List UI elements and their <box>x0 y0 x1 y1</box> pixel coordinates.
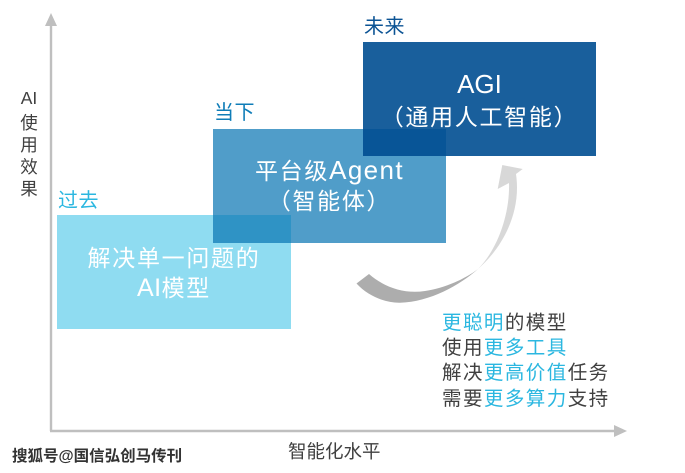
text block: key points: 使用更多工具 <box>442 337 568 359</box>
heading: past: 过去 <box>58 190 99 212</box>
y axis label: 效 <box>20 157 38 177</box>
panel: future box <box>363 42 596 156</box>
panel: present box <box>213 129 446 243</box>
future box text: AGI <box>457 69 502 99</box>
y axis label <box>20 88 38 199</box>
y axis label: 使 <box>20 113 38 133</box>
heading: future: 未来 <box>364 16 405 38</box>
x axis label: 智能化水平 <box>288 441 381 462</box>
watermark: 搜狐号@国信弘创马传刊 <box>12 448 182 465</box>
present box text <box>255 155 404 214</box>
future box text <box>381 69 578 130</box>
present box text: 平台级Agent <box>255 155 404 185</box>
future box text: （通用人工智能） <box>381 104 578 130</box>
heading: present: 当下 <box>214 102 255 124</box>
past box text <box>88 245 260 302</box>
text block: key points: 需要更多算力支持 <box>442 388 610 410</box>
present box text: （智能体） <box>268 188 391 214</box>
past box text: AI模型 <box>137 274 211 302</box>
text block: key points <box>442 312 610 410</box>
y axis label: 用 <box>20 135 38 155</box>
past box text: 解决单一问题的 <box>88 245 260 271</box>
panel: past box <box>57 215 291 329</box>
text block: key points: 解决更高价值任务 <box>442 362 610 384</box>
text block: key points: 更聪明的模型 <box>442 312 568 334</box>
y axis label: AI <box>21 88 37 108</box>
y axis label: 果 <box>20 179 38 199</box>
